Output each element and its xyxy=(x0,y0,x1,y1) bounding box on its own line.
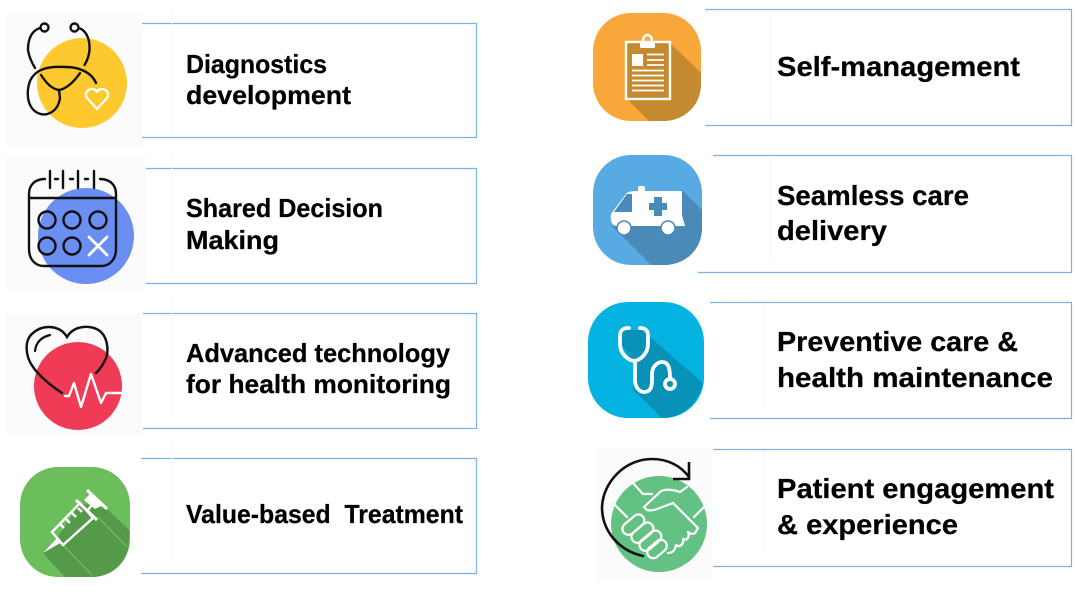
icon: handshake with arrow xyxy=(595,447,712,581)
icon: ambulance xyxy=(593,155,702,265)
label: Advanced technology for health monitoring: Advanced technology xyxy=(186,338,451,368)
label: Self-management: Self-management xyxy=(777,51,1020,82)
icon: medical stethoscope xyxy=(588,302,704,418)
label: Shared Decision Making: Making xyxy=(186,225,279,255)
panel: Preventive care & health maintenance xyxy=(588,302,1072,418)
label: Preventive care & health maintenance: Preventive care & xyxy=(777,326,1018,357)
label: Diagnostics development: Diagnostics xyxy=(186,49,327,79)
icon: clipboard xyxy=(593,13,701,121)
label: Patient engagement & experience: Patient engagement xyxy=(777,473,1054,504)
panel: Self-management xyxy=(593,10,1072,126)
label: Preventive care & health maintenance: health maintenance xyxy=(777,362,1053,393)
label: Advanced technology for health monitoring xyxy=(186,338,451,399)
icon: heart with pulse xyxy=(6,314,142,436)
label: Diagnostics development: development xyxy=(186,80,351,110)
panel: Shared Decision Making xyxy=(6,152,476,292)
label: Value-based Treatment: Value-based Treatment xyxy=(186,499,463,529)
panel: Patient engagement & experience xyxy=(595,447,1072,581)
label: Seamless care delivery: delivery xyxy=(777,215,887,246)
label: Seamless care delivery xyxy=(777,180,969,246)
icon: calendar xyxy=(6,155,146,292)
label: Shared Decision Making xyxy=(186,193,383,255)
panel: Seamless care delivery xyxy=(593,155,1072,272)
icon: stethoscope with heart xyxy=(6,13,142,147)
label: Shared Decision Making: Shared Decision xyxy=(186,193,383,223)
panel: Advanced technology for health monitoring xyxy=(6,298,476,436)
label: Preventive care & health maintenance xyxy=(777,326,1053,393)
panel: Diagnostics development xyxy=(6,7,476,147)
label: Advanced technology for health monitoring: for health monitoring xyxy=(186,369,451,399)
label: Seamless care delivery: Seamless care xyxy=(777,180,969,211)
label: Patient engagement & experience: & experience xyxy=(777,509,958,540)
panel: Value-based Treatment xyxy=(20,442,476,577)
label: Patient engagement & experience xyxy=(777,473,1054,540)
label: Diagnostics development xyxy=(186,49,351,110)
icon: syringe xyxy=(20,467,130,577)
